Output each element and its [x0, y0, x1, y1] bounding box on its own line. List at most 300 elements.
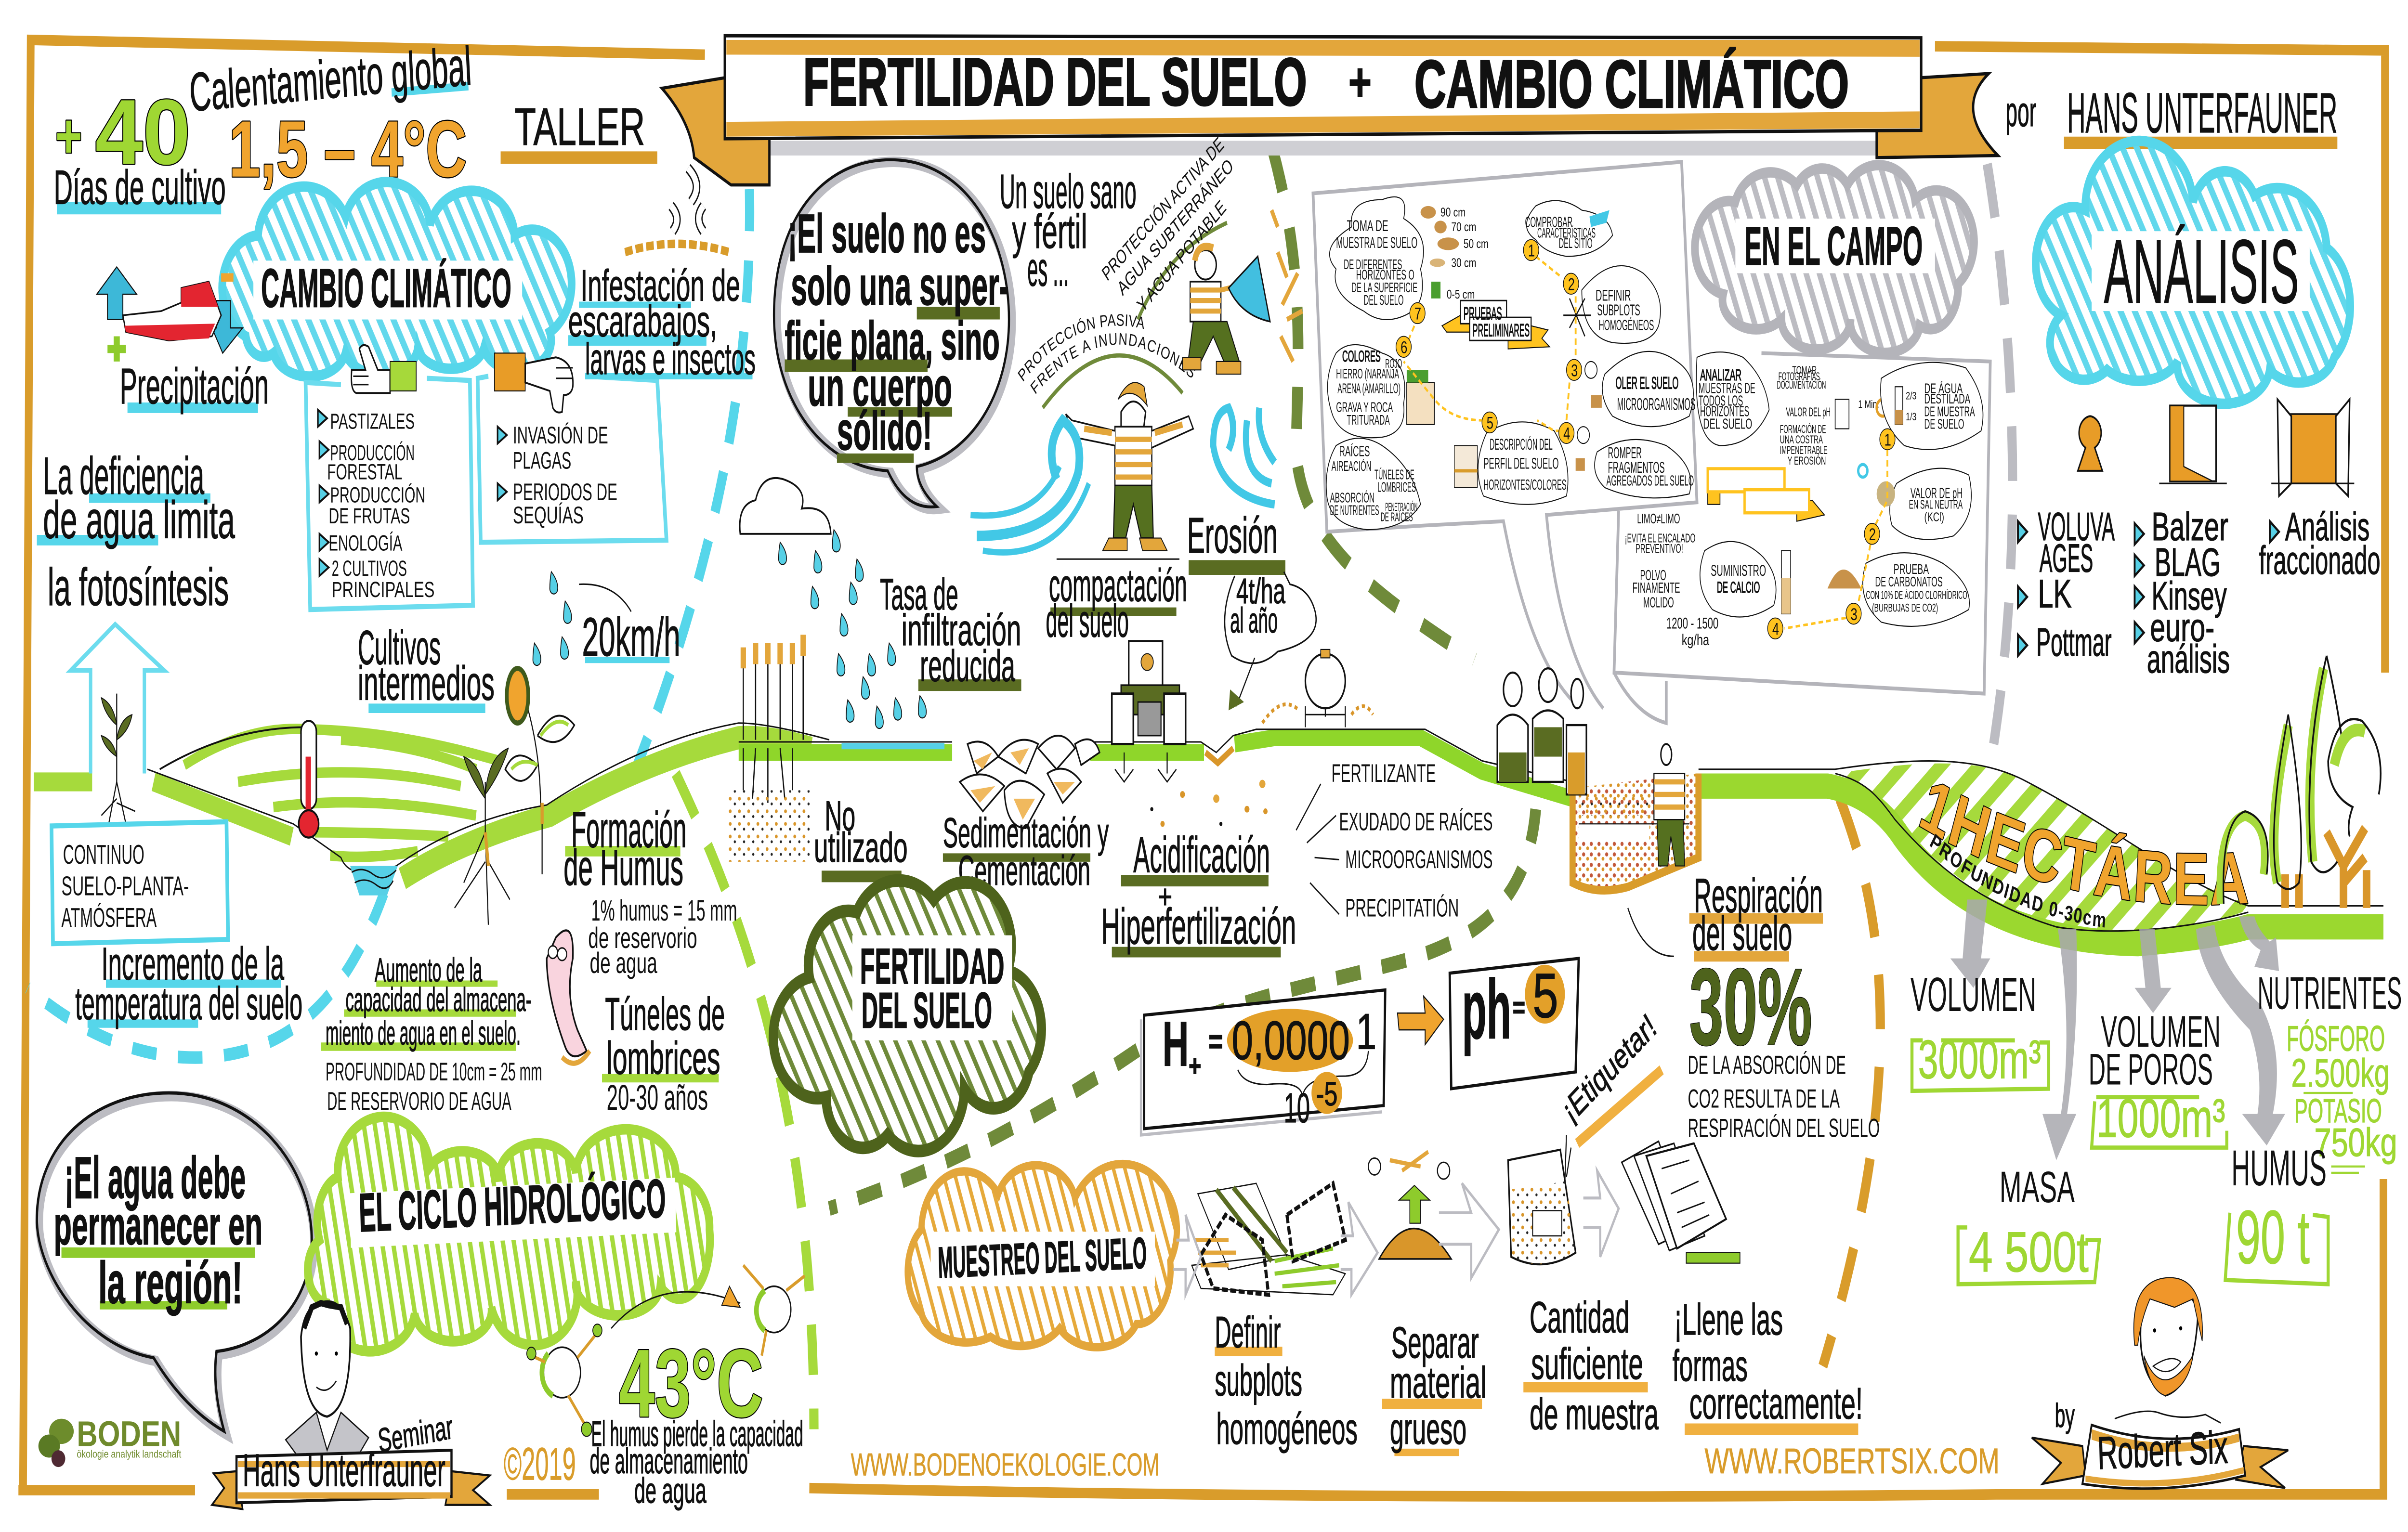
soil depth labels: 90 cm — [1440, 205, 1466, 219]
list: key methods: AGES — [2040, 536, 2093, 581]
soil respiration block: DE LA ABSORCIÓN DE — [1688, 1051, 1846, 1080]
mini-cloud: toma de muestra: HORIZONTES O — [1356, 268, 1414, 283]
speech bubble: soil is a body: solo una super- — [791, 256, 1009, 317]
step label: definir: subplots — [1215, 1356, 1302, 1405]
cloud: cambio climatico: CAMBIO CLIMÁTICO — [261, 258, 511, 319]
sedimentation text: Cementación — [958, 847, 1090, 894]
erosion text and cloud — [1187, 507, 1316, 711]
arrow: pit to respiration — [1628, 908, 1674, 956]
water deficiency text: de agua limita — [43, 491, 235, 550]
list: open door methods: fraccionado — [2259, 538, 2381, 583]
panel: benefits list: PASTIZALES — [330, 409, 415, 434]
icon: thumb down — [495, 353, 573, 413]
icon: molecule right — [743, 1265, 805, 1356]
stat: nutrientes — [2258, 967, 2402, 1173]
mini-cloud: comprobar: COMPROBAR — [1525, 214, 1572, 230]
cloud: analisis — [2036, 141, 2350, 404]
ground: hectare — [1699, 761, 2383, 944]
formula card: H+: 10 — [1284, 1085, 1310, 1132]
global warming: 1,5 – 4°C — [229, 104, 467, 194]
mini-cloud: analizar: MUESTRAS DE — [1699, 380, 1755, 396]
intermediate crops label: Cultivos — [358, 620, 441, 675]
banner: Robert Six — [2032, 1397, 2288, 1489]
calcium notes: LIMO≠LIMO — [1637, 512, 1680, 527]
worm tunnels text: lombrices — [607, 1032, 720, 1084]
formula card: pH: ph — [1462, 963, 1511, 1056]
pit with soil profile — [1572, 744, 1699, 890]
formula card: pH — [1450, 959, 1579, 1089]
formula card: H+: = — [1209, 1023, 1223, 1060]
cloud: fertilidad del suelo: DEL SUELO — [862, 983, 992, 1039]
arrow: nutrientes — [2239, 916, 2279, 971]
left ribbon tail — [662, 78, 770, 185]
acidification causes list — [1296, 759, 1492, 922]
speech bubble: water region: permanecer en — [54, 1195, 262, 1256]
molecule diagram and 43 degrees: El humus pierde la capacidad — [591, 1414, 803, 1454]
cloud: ciclo hidrologico: EL CICLO HIDROLÓGICO — [358, 1168, 667, 1244]
mini-cloud: comprobar — [1525, 201, 1612, 257]
cloud: muestreo del suelo: MUESTREO DEL SUELO — [937, 1228, 1147, 1288]
active protection label: Y AGUA POTABLE — [1134, 195, 1229, 316]
infiltration text: reducida — [920, 641, 1015, 691]
field documentation notes: Y EROSIÓN — [1788, 454, 1826, 467]
step label: cantidad: suficiente — [1531, 1339, 1643, 1389]
intermediate crops label: intermedios — [358, 656, 495, 710]
icon: earthworm — [547, 930, 589, 1063]
field documentation notes: VALOR DEL pH — [1786, 404, 1831, 419]
water storage text: capacidad del almacena- — [345, 981, 531, 1018]
list: door methods: Kinsey — [2151, 574, 2227, 618]
mini-cloud: raices — [1326, 438, 1421, 530]
formula card: H+: 0,0000 — [1231, 1011, 1350, 1071]
step arrows — [1404, 257, 1576, 431]
numbered circles: 4 — [1563, 425, 1570, 443]
infiltration text: Tasa de — [880, 570, 958, 620]
panel: benefits list: FORESTAL — [327, 459, 402, 484]
step arrows and circles: 2 — [1869, 525, 1876, 544]
numbered circles: 5 — [1487, 414, 1493, 433]
molecule diagram and 43 degrees: de almacenamiento — [589, 1441, 748, 1481]
ground: centre landscape — [728, 635, 1572, 862]
speech bubble: soil is a body: ficie plana, sino — [785, 311, 1000, 372]
soil texture — [728, 790, 811, 862]
water storage text: miento de agua en el suelo. — [326, 1014, 521, 1052]
mini-cloud: prueba de carbonatos: (BURBUJAS DE CO2) — [1872, 602, 1938, 614]
humus formation — [563, 802, 737, 980]
acidification causes list: EXUDADO DE RAÍCES — [1339, 807, 1492, 836]
portrait: Robert Six — [2115, 1278, 2221, 1423]
list: key methods: Pottmar — [2036, 620, 2112, 664]
url: robertsix: WWW.ROBERTSIX.COM — [1705, 1441, 2000, 1481]
mini-cloud: prueba de carbonatos: PRUEBA — [1894, 562, 1929, 577]
field documentation notes — [1777, 364, 1889, 467]
ground: left landscape — [34, 721, 829, 896]
panel: benefits list: PRODUCCIÓN — [330, 441, 415, 465]
soil respiration block: RESPIRACIÓN DEL SUELO — [1688, 1114, 1880, 1143]
mini-cloud: agua destilada: DE ÁGUA — [1924, 381, 1963, 396]
acidification text: Hiperfertilización — [1101, 898, 1296, 955]
icon: tractor — [1112, 641, 1186, 782]
arrow: masa — [2042, 929, 2077, 1160]
banner: Robert Six: Robert Six — [2097, 1421, 2228, 1479]
icon: small plant — [101, 694, 135, 830]
field documentation notes: FOTOGRAFÍAS — [1779, 371, 1820, 383]
mini-cloud: valor de pH: EN SAL NEUTRA — [1909, 497, 1963, 511]
mini-cloud: oler: MICROORGANISMOS — [1617, 395, 1695, 414]
sedimentation text: Sedimentación y — [943, 810, 1109, 857]
calcium notes: kg/ha — [1682, 632, 1709, 649]
continuum box — [52, 822, 228, 944]
icon: coarse material pile — [1368, 1152, 1451, 1259]
growing days: Días de cultivo — [54, 160, 226, 214]
field documentation notes: TOMAR — [1792, 364, 1817, 377]
soil depth labels: 70 cm — [1451, 220, 1476, 234]
stat: humus — [2225, 1140, 2328, 1284]
mini-cloud: analizar: ANALIZAR — [1700, 367, 1741, 384]
unused text: No — [824, 793, 855, 840]
mini-cloud: colores: HIERRO (NARANJA — [1336, 367, 1399, 382]
icon: larvae — [625, 168, 730, 252]
panel: risks list: SEQUÍAS — [513, 502, 584, 529]
icon: sunflower and plants — [455, 668, 575, 925]
mini-cloud: analizar — [1696, 352, 1769, 445]
step label: separar: grueso — [1390, 1404, 1466, 1454]
soil respiration block: 30% — [1689, 946, 1812, 1068]
active protection label: AGUA SUBTERRÁNEO — [1114, 154, 1236, 300]
panel: risks list — [478, 376, 667, 542]
arrow: continuum upward — [71, 624, 164, 830]
formula card: H+: H — [1163, 1009, 1189, 1079]
icon: stones — [960, 736, 1099, 828]
mini-cloud: suministro de calcio — [1700, 542, 1791, 617]
soil respiration block — [1688, 868, 1880, 1143]
logo: Boden: ökologie analytik landschaft — [77, 1449, 182, 1460]
speech bubble: water region: la región! — [98, 1250, 243, 1316]
water storage text: Aumento de la — [375, 951, 483, 989]
calcium notes: ¡EVITA EL ENCALADO — [1625, 531, 1695, 545]
icon: flood waves — [970, 408, 1275, 552]
cyan dashed lower divider — [27, 893, 384, 1058]
panel: risks list: PERIODOS DE — [513, 479, 617, 506]
mini-cloud: romper — [1576, 427, 1694, 498]
water deficiency text: La deficiencia — [43, 447, 205, 506]
logo: Boden — [39, 1414, 182, 1467]
title text: + — [1348, 52, 1372, 113]
formula card: H+: -5 — [1316, 1075, 1337, 1113]
mini-cloud: colores — [1328, 345, 1434, 438]
step label: cantidad — [1523, 1293, 1659, 1439]
icon: precipitation Austria map — [97, 267, 243, 362]
stat: nutrientes: POTASIO — [2294, 1092, 2382, 1130]
panel: risks list: INVASIÓN DE — [513, 422, 608, 449]
soil respiration block: Respiración — [1694, 868, 1823, 922]
stat: humus: 90 t — [2236, 1195, 2310, 1280]
mini-cloud: raices: RAÍCES — [1339, 443, 1370, 459]
ribbon: pruebas preliminares: PRELIMINARES — [1473, 320, 1530, 340]
label: etiquetar: ¡Etiquetar! — [1557, 1006, 1662, 1130]
step label: separar: Separar — [1391, 1318, 1479, 1368]
humus formation: de agua — [589, 948, 657, 980]
list: door methods: BLAG — [2155, 540, 2221, 584]
soil respiration block: del suelo — [1692, 906, 1792, 961]
passive protection label: PROTECCIÓN PASIVA — [1018, 314, 1144, 381]
stat: masa: MASA — [2000, 1163, 2075, 1212]
icon: man with shield — [1182, 210, 1302, 374]
banner: seminar speaker — [212, 1408, 490, 1509]
mini-cloud: raices: LOMBRICES — [1377, 480, 1416, 495]
speech bubble: soil is a body: ¡El suelo no es — [788, 203, 986, 264]
list: key methods: LK — [2038, 571, 2072, 616]
infiltration text: infiltración — [902, 606, 1021, 655]
icon: fertiliser tank — [1262, 649, 1373, 727]
acidification text: Acidificación — [1133, 827, 1270, 883]
mini-cloud: agua destilada: 1/3 — [1906, 412, 1916, 423]
soil depth labels: 0-5 cm — [1447, 287, 1475, 301]
step label: cantidad: Cantidad — [1530, 1293, 1629, 1342]
list: door methods: análisis — [2147, 637, 2230, 681]
insect infestation text — [568, 261, 756, 384]
mini-cloud: prueba de carbonatos — [1828, 553, 1969, 626]
cloud: muestreo del suelo — [908, 1164, 1177, 1347]
banner: seminar speaker: Seminar — [376, 1408, 455, 1459]
cloud: analisis: ANÁLISIS — [2104, 221, 2299, 322]
infiltration text — [880, 570, 1021, 691]
continuum box: CONTINUO — [63, 839, 144, 870]
worm tunnels text: Túneles de — [605, 988, 725, 1040]
step arrows and circles: 3 — [1850, 605, 1858, 624]
field documentation notes: IMPENETRABLE — [1780, 444, 1828, 457]
grey dashed divider — [1987, 164, 2013, 746]
hectare label: PROFUNDIDAD 0-30cm — [1929, 834, 2106, 927]
mini-cloud: toma de muestra: DE DIFERENTES — [1344, 258, 1402, 273]
panel: benefits list: DE FRUTAS — [328, 504, 410, 528]
mini-cloud: valor de pH: VALOR DE pH — [1911, 485, 1963, 501]
mini-cloud: raices: TÚNELES DE — [1374, 467, 1414, 482]
banner: Robert Six: by — [2055, 1397, 2075, 1434]
mini-cloud: oler: OLER EL SUELO — [1616, 374, 1678, 393]
panel: benefits list: PRINCIPALES — [332, 577, 434, 602]
mini-cloud: colores: GRAVA Y ROCA — [1336, 401, 1393, 415]
light green dashed divider — [676, 773, 814, 1429]
mini-cloud: definir: DEFINIR — [1596, 287, 1631, 304]
numbered circles: 2 — [1568, 275, 1575, 294]
step label: cantidad: de muestra — [1530, 1389, 1659, 1439]
mini-cloud: definir: SUBPLOTS — [1597, 301, 1640, 319]
mini-cloud: comprobar: CARACTERÍSTICAS — [1537, 226, 1596, 241]
mini-cloud: toma de muestra: MUESTRA DE SUELO — [1336, 234, 1417, 252]
numbered circles — [1396, 240, 1582, 443]
mini-cloud: romper: ROMPER — [1608, 444, 1642, 462]
title text — [803, 44, 1849, 121]
formula card: pH: 5 — [1532, 961, 1558, 1031]
icon: thermometer — [299, 721, 319, 838]
olive dashed divider upper — [1273, 151, 1474, 660]
sedimentation text — [943, 810, 1109, 894]
water storage text: DE RESERVORIO DE AGUA — [327, 1087, 511, 1115]
step arrows and circles: 1 — [1885, 431, 1891, 449]
stat: volumen: 3000m³ — [1918, 1029, 2041, 1091]
title text: CAMBIO CLIMÁTICO — [1414, 46, 1849, 121]
mini-cloud: romper: AGREGADOS DEL SUELO — [1606, 472, 1694, 489]
mini-cloud: raices: DE NUTRIENTES — [1330, 504, 1379, 518]
erosion text and cloud: al año — [1230, 600, 1278, 640]
field documentation notes: FORMACIÓN DE — [1780, 423, 1826, 436]
list: door methods — [2134, 505, 2230, 681]
growing days: 40 — [95, 80, 190, 184]
ribbon: pruebas preliminares — [1442, 300, 1549, 349]
cyan dashed divider — [636, 189, 750, 769]
unused text: utilizado — [814, 824, 908, 871]
erosion text and cloud: 4t/ha — [1236, 571, 1286, 611]
mini-cloud: descripcion: HORIZONTES/COLORES — [1483, 477, 1567, 493]
icon: rain cloud — [740, 478, 926, 728]
mini-cloud: agua destilada: DE SUELO — [1924, 417, 1964, 432]
stat: volumen: VOLUMEN — [1911, 967, 2036, 1021]
insect infestation text: Infestación de — [580, 261, 740, 311]
mini-cloud: descripcion: PERFIL DEL SUELO — [1483, 455, 1559, 472]
panel: benefits list: PRODUCCIÓN — [330, 482, 425, 507]
compaction text — [1046, 559, 1187, 647]
speech bubble: soil is a body: sólido! — [837, 401, 932, 462]
calcium notes: FINAMENTE — [1633, 580, 1680, 596]
icon: people group — [1497, 668, 1586, 794]
insect infestation text: larvas e insectos — [585, 335, 756, 384]
mini-cloud: colores: TRITURADA — [1347, 413, 1390, 428]
list: open door methods: Análisis — [2285, 505, 2369, 549]
acidification text: + — [1158, 878, 1172, 915]
icon: keyhole — [2078, 416, 2102, 471]
title banner — [662, 36, 1998, 185]
growing days: + — [55, 101, 82, 171]
precipitation label: Precipitación — [120, 359, 269, 415]
calcium notes: POLVO — [1640, 567, 1666, 584]
humus formation: de Humus — [563, 840, 683, 896]
soil temperature text — [75, 938, 302, 1029]
speech bubble: soil is a body: un cuerpo — [808, 357, 952, 418]
acidification text — [1101, 827, 1296, 955]
mini-cloud: toma de muestra — [1330, 197, 1424, 320]
icon: sample bag — [1508, 1150, 1576, 1264]
step arrows and circles: 4 — [1772, 620, 1779, 638]
soil depth labels: 50 cm — [1464, 236, 1489, 251]
title text: FERTILIDAD DEL SUELO — [803, 44, 1307, 119]
water storage text — [321, 951, 542, 1115]
cloud: fertilidad del suelo — [773, 881, 1041, 1151]
step label: llene: ¡Llene las — [1674, 1295, 1783, 1345]
mini-cloud: prueba de carbonatos: CON 10% DE ÁCIDO CLORHÍDRICO — [1866, 589, 1967, 602]
cloud: fertilidad del suelo: FERTILIDAD — [860, 938, 1004, 995]
icon: half open door — [2159, 406, 2227, 483]
stat: volumen de poros: VOLUMEN — [2101, 1007, 2221, 1057]
orange dashed divider — [1823, 799, 1880, 1366]
url: bodenoekologie: WWW.BODENOEKOLOGIE.COM — [851, 1447, 1160, 1482]
mini-cloud: agua destilada — [1881, 363, 1983, 450]
icon: water — [350, 866, 398, 896]
speech bubble: water region — [37, 1093, 314, 1434]
icon: reeds — [743, 635, 803, 803]
mini-cloud: toma de muestra: TOMA DE — [1347, 218, 1388, 235]
soil temperature text: Incremento de la — [101, 938, 284, 989]
list: key methods — [2018, 505, 2115, 664]
list: door methods: Balzer — [2151, 505, 2228, 549]
intro text — [1000, 164, 1137, 296]
hectare label: 1HECTÁREA — [1919, 784, 2249, 906]
erosion text and cloud: Erosión — [1187, 507, 1278, 564]
icon: forms — [1622, 1141, 1740, 1263]
formula card: H+: + — [1189, 1050, 1201, 1083]
mini-cloud: prueba de carbonatos: DE CARBONATOS — [1875, 575, 1943, 590]
stat: nutrientes: 2.500kg — [2291, 1051, 2390, 1095]
calcium notes: PREVENTIVO! — [1636, 541, 1683, 556]
panel: benefits list: 2 CULTIVOS — [332, 556, 407, 581]
stat: volumen de poros: DE POROS — [2089, 1045, 2213, 1094]
formula card: pH: = — [1513, 991, 1525, 1024]
acidification causes list: FERTILIZANTE — [1332, 759, 1436, 787]
soil particles — [1150, 780, 1268, 827]
stat: volumen de poros — [2089, 1007, 2227, 1149]
water storage text: PROFUNDIDAD DE 10cm = 25 mm — [326, 1057, 542, 1086]
numbered circles: 1 — [1528, 242, 1535, 260]
mini-cloud: descripcion — [1454, 422, 1568, 505]
intermediate crops label — [358, 620, 495, 710]
mini-cloud: analizar: TODOS LOS — [1699, 392, 1743, 409]
humus formation: 1% humus = 15 mm — [591, 895, 737, 927]
icon: molecule left — [527, 1324, 602, 1436]
copyright: ©2019 — [504, 1438, 576, 1490]
global warming — [188, 36, 473, 194]
stat: volumen — [1911, 967, 2049, 1091]
mini-cloud: valor de pH: (KCl) — [1924, 510, 1944, 524]
step label: separar — [1382, 1318, 1487, 1454]
icon: trees — [2220, 656, 2381, 908]
logo: Boden: BODEN — [77, 1414, 181, 1454]
mini-cloud: raices: AIREACIÓN — [1332, 459, 1372, 474]
step label: separar: material — [1390, 1358, 1487, 1408]
soil temperature text: temperatura del suelo — [75, 977, 302, 1029]
soil depth labels: 30 cm — [1451, 255, 1476, 270]
numbered circles: 6 — [1400, 338, 1407, 357]
arrow: humus — [2196, 925, 2285, 1145]
growing days — [54, 80, 226, 214]
formula card: H+: 1 — [1356, 1004, 1376, 1060]
mini-cloud: colores: COLORES — [1342, 348, 1381, 365]
list: door methods: euro- — [2150, 605, 2214, 650]
right ribbon tail — [1877, 74, 1998, 157]
list: open door methods — [2259, 505, 2381, 583]
mini-cloud: colores: ARENA (AMARILLO) — [1337, 381, 1400, 396]
speed label and drops — [533, 571, 681, 668]
field documentation notes: UNA COSTRA — [1780, 434, 1823, 446]
field documentation notes: DOCUMENTACIÓN — [1777, 379, 1826, 391]
worm tunnels text — [602, 988, 725, 1117]
field documentation notes: 1 Min. — [1858, 399, 1879, 411]
cloud: en el campo — [1695, 165, 1974, 353]
ribbon: pruebas preliminares: PRUEBAS — [1464, 303, 1502, 324]
mini-cloud: comprobar: DEL SITIO — [1559, 236, 1593, 251]
step label: llene — [1673, 1295, 1863, 1429]
mini-cloud: definir: HOMOGÉNEOS — [1599, 317, 1654, 333]
mini-cloud: suministro de calcio: DE CALCIO — [1717, 579, 1760, 597]
step label: definir: Definir — [1215, 1308, 1281, 1357]
compaction text: del suelo — [1046, 595, 1129, 647]
icon: thumb up — [352, 345, 416, 393]
stat: nutrientes: 750kg — [2314, 1120, 2397, 1165]
panel: pruebas preliminares — [1313, 162, 1697, 708]
step label: definir — [1215, 1308, 1358, 1454]
panel: analizar muestras — [1614, 352, 1990, 723]
acidification causes list: PRECIPITATIÓN — [1345, 893, 1459, 922]
step label: llene: formas — [1673, 1341, 1748, 1391]
